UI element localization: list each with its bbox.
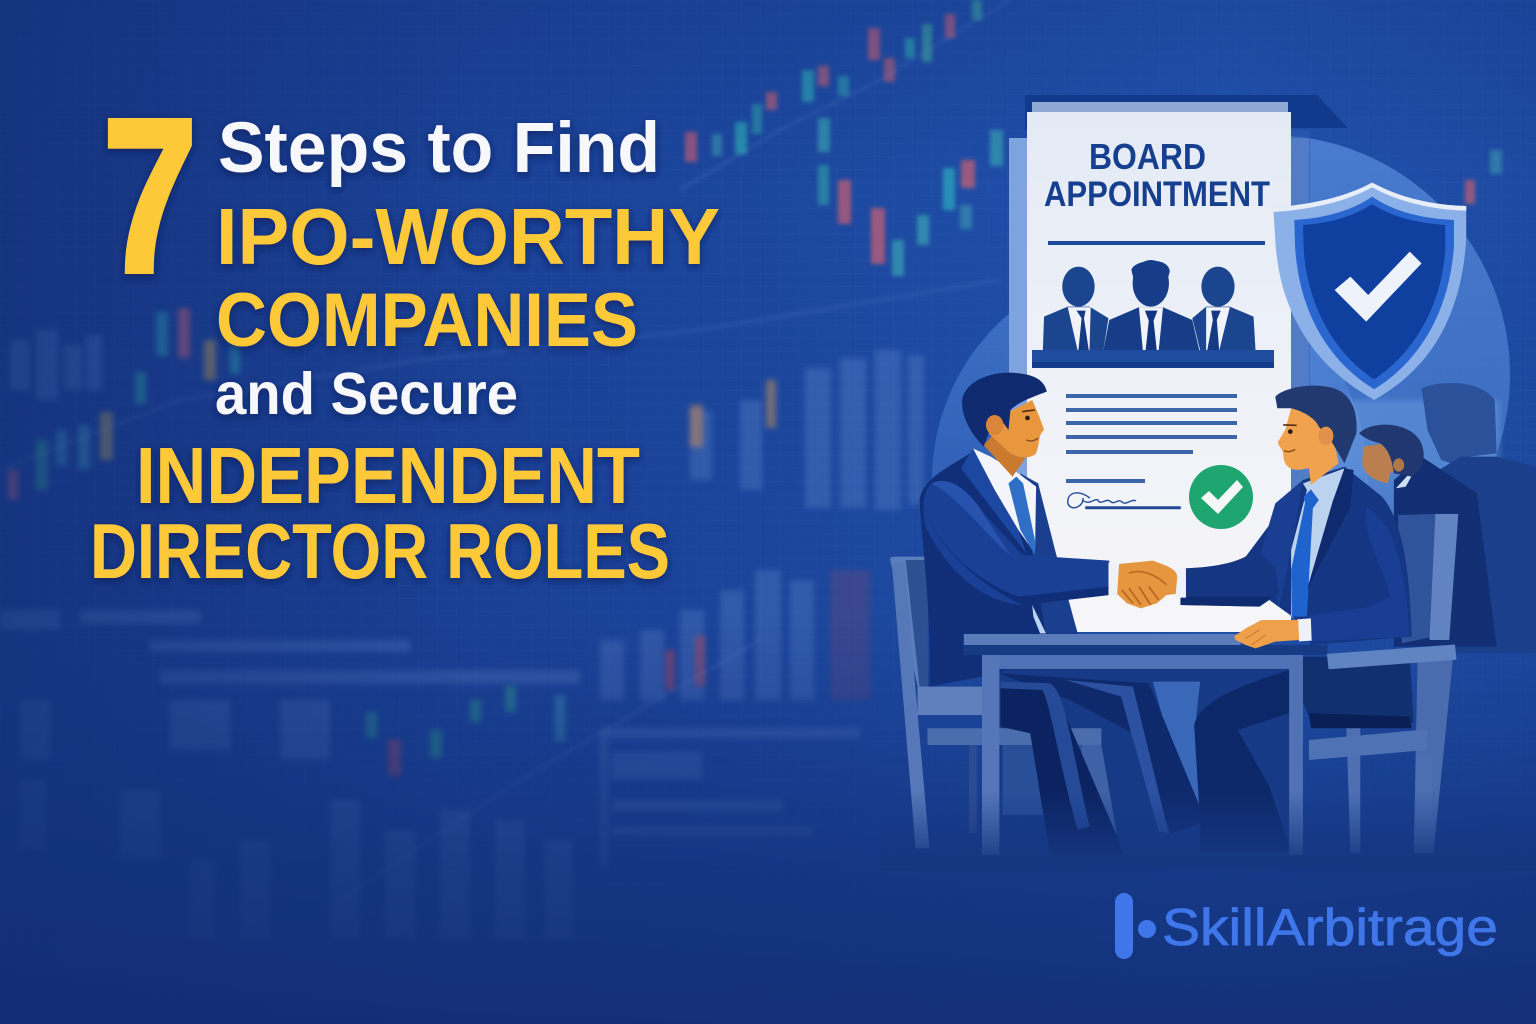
big numeral 7: 7 (103, 75, 197, 318)
line: Steps to Find: Steps to Find (218, 109, 660, 188)
line: COMPANIES: COMPANIES (216, 278, 638, 363)
under-table shadow (999, 668, 1299, 855)
icon: shield (1273, 183, 1466, 400)
jacket (920, 450, 1078, 687)
shirt and tie (1291, 468, 1344, 617)
trend lines (0, 0, 1010, 900)
shirt and tie (973, 448, 1036, 553)
line: and Secure: and Secure (215, 361, 518, 427)
icon: green check (1189, 465, 1253, 529)
icon: three board members (1043, 260, 1256, 351)
handshake and resting hand (1108, 561, 1312, 648)
logo mark (1115, 893, 1156, 959)
face: left man (962, 373, 1047, 477)
chair: left (890, 557, 1117, 848)
jacket (1236, 467, 1412, 645)
signature (1068, 493, 1180, 508)
heading: board appointment: BOARD (1089, 136, 1206, 177)
heading: board appointment: APPOINTMENT (1044, 175, 1270, 214)
desk bar (1032, 350, 1274, 368)
faint volume bars (0, 330, 924, 940)
heading: board appointment (1044, 136, 1270, 214)
table (964, 634, 1457, 855)
body text lines (1066, 394, 1237, 483)
logo: SkillArbitrage (1115, 893, 1498, 959)
panel: document (1009, 95, 1348, 632)
chair: right back (1344, 514, 1458, 853)
figure: left man (920, 448, 1206, 855)
sleeve (1180, 550, 1279, 607)
face: right man (1275, 386, 1357, 485)
sleeve (923, 481, 1109, 605)
legs (1194, 670, 1299, 852)
candlesticks rising trend (685, 0, 1502, 276)
backdrop glow circles (932, 135, 1510, 698)
legs (999, 673, 1206, 833)
line: INDEPENDENT: INDEPENDENT (136, 431, 640, 520)
line: DIRECTOR ROLES: DIRECTOR ROLES (90, 507, 670, 595)
title (90, 75, 720, 595)
floor fade (880, 790, 1536, 870)
figure: second seated man (1359, 425, 1497, 647)
figure: right man (1180, 467, 1414, 852)
logo wordmark: SkillArbitrage (1162, 899, 1498, 957)
illustration: board appointment meeting (880, 95, 1536, 870)
line: IPO-WORTHY: IPO-WORTHY (216, 192, 720, 281)
background figure silhouette (1422, 383, 1536, 653)
